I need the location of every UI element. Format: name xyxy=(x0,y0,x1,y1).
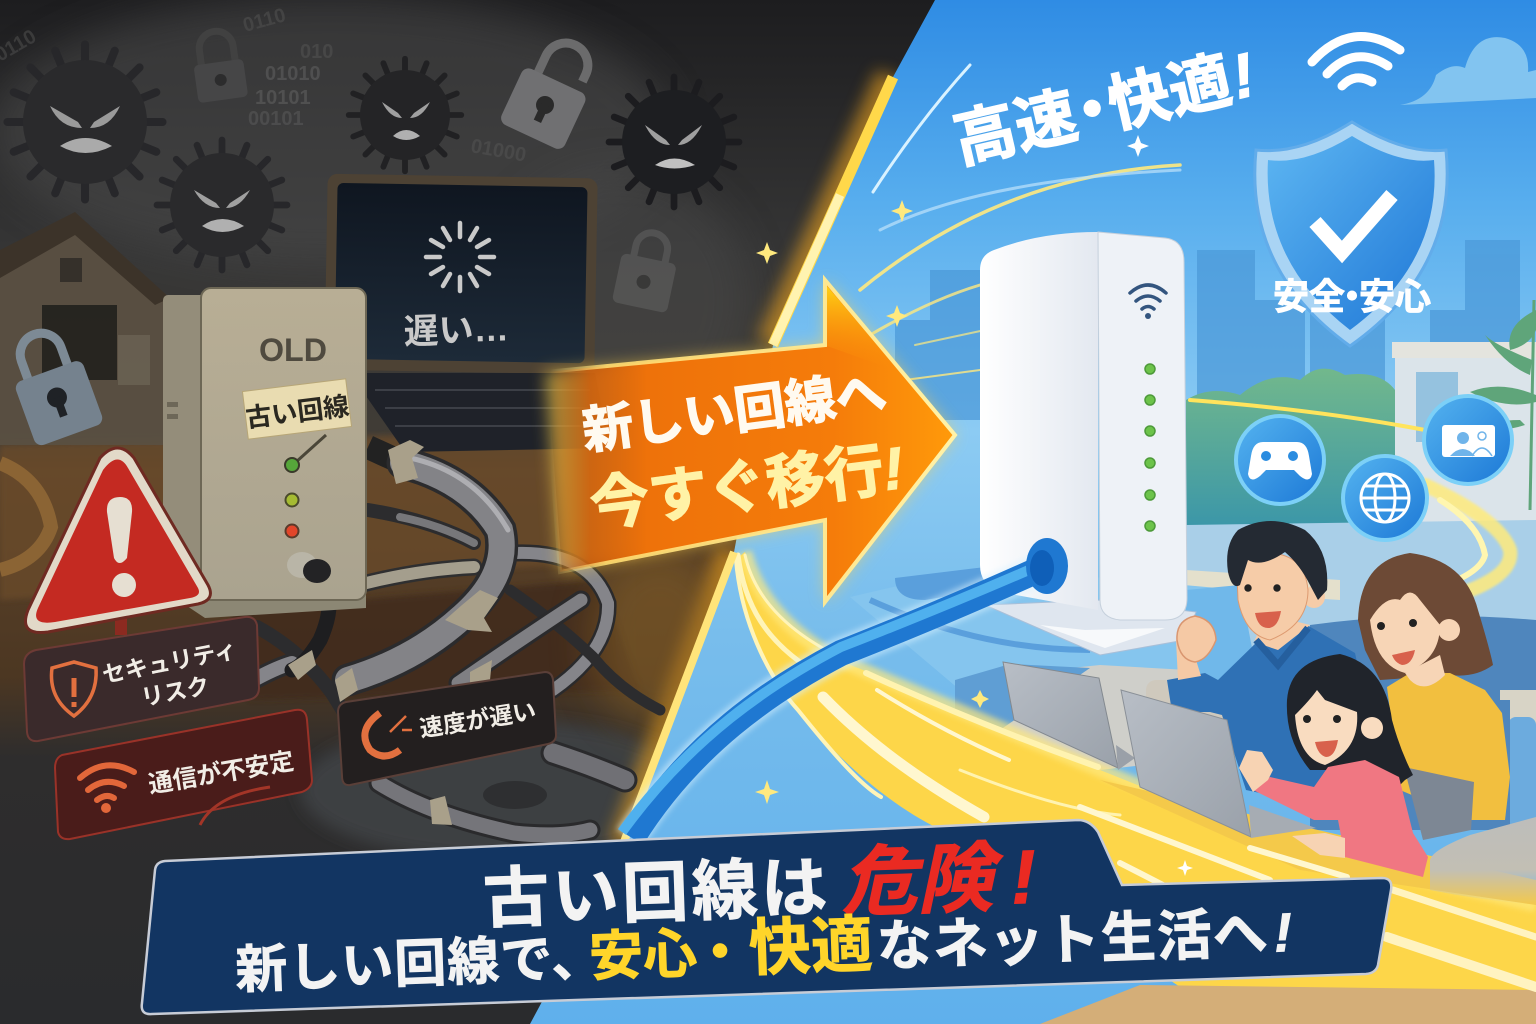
icon: globe bubble xyxy=(1343,456,1427,540)
sofa blue xyxy=(1310,616,1536,700)
old router xyxy=(163,288,366,618)
panel: bright new-line background xyxy=(500,0,1536,1024)
terrace xyxy=(1186,520,1536,647)
text: arrow line 1: 新しい回線へ xyxy=(579,363,890,460)
icon: cloud xyxy=(1400,37,1536,105)
text: slow speed: 速度が遅い xyxy=(418,697,538,742)
arrow xyxy=(545,280,955,602)
status LEDs xyxy=(285,458,299,538)
panel: dark old-line background xyxy=(0,0,898,1024)
heading: fast and comfortable: 高速・快適! xyxy=(948,41,1261,177)
icon: security shield xyxy=(1255,122,1447,346)
person: father xyxy=(1167,521,1370,810)
sparkles xyxy=(755,135,1149,804)
text: security risk: セキュリティ xyxy=(100,636,239,688)
icon: padlock left xyxy=(0,322,104,447)
city buildings xyxy=(895,240,1520,420)
text: slow: 遅い… xyxy=(403,309,509,352)
laptop: slow loading xyxy=(324,174,610,452)
binary digits: 10101 xyxy=(255,87,311,109)
binary digits: 0110 xyxy=(241,4,288,37)
text: unstable: 通信が不安定 xyxy=(146,746,296,799)
icon: virus right xyxy=(609,77,739,207)
icon: virus center left xyxy=(157,140,287,270)
divider glow line xyxy=(622,77,893,847)
white router xyxy=(980,232,1196,655)
banner line 1: 古い回線は xyxy=(482,850,832,936)
laptop: front center xyxy=(1121,690,1316,838)
banner line 2: 快適 xyxy=(748,911,874,984)
binary digits: 00101 xyxy=(248,108,304,130)
icon: wifi warning xyxy=(80,765,134,813)
icon: open padlock xyxy=(498,29,605,152)
status LEDs xyxy=(1145,364,1155,531)
label: old line paper xyxy=(242,379,352,439)
laptop: back left xyxy=(1003,662,1135,770)
person: mother xyxy=(1358,553,1510,820)
label: old line paper: 古い回線 xyxy=(244,391,351,433)
laptop: right xyxy=(1404,767,1474,840)
icon: virus top center xyxy=(349,59,461,171)
padlock on laptop side xyxy=(612,227,682,313)
icon: game bubble xyxy=(1236,416,1324,504)
icon: slow gauge xyxy=(365,713,412,756)
icon: shield alert xyxy=(51,662,96,716)
connector xyxy=(1026,538,1068,594)
text: OLD: OLD xyxy=(259,332,327,368)
blue fiber cable xyxy=(622,538,1068,838)
icon: warning triangle xyxy=(26,448,210,635)
panel: security risk: リスク xyxy=(139,672,212,711)
sky streaks xyxy=(860,65,1180,380)
person: daughter xyxy=(1239,654,1428,877)
banner line 2: 新しい回線で、 xyxy=(234,929,605,1000)
text: arrow line 2: 今すぐ移行! xyxy=(587,435,907,539)
streak lines xyxy=(736,400,1536,987)
port and plug xyxy=(287,552,331,583)
icon: spinner xyxy=(426,223,494,291)
family xyxy=(1003,521,1510,877)
icon: virus top left xyxy=(7,44,162,200)
binary digits: 010 xyxy=(300,41,333,63)
binary digits: 01010 xyxy=(265,63,321,85)
binary digits xyxy=(0,4,528,167)
worn cables xyxy=(250,447,660,835)
icon: video bubble xyxy=(1424,396,1512,484)
binary digits: 01000 xyxy=(469,135,528,167)
banner line 1: ! xyxy=(1009,835,1038,921)
keyboard xyxy=(350,373,610,452)
banner line 1: 危険 xyxy=(839,836,1006,926)
banner line 2: なネット生活へ xyxy=(876,902,1270,978)
speed band xyxy=(735,552,1536,1000)
sofa arm bottom right xyxy=(1430,817,1536,905)
plant xyxy=(1470,300,1536,510)
building at right xyxy=(1392,342,1536,540)
icon: large wifi xyxy=(1312,37,1400,86)
banner xyxy=(142,820,1391,1014)
icon: router wifi xyxy=(1130,285,1166,319)
panel: slow speed xyxy=(338,672,556,785)
text: safe: 安全・安心 xyxy=(1273,276,1431,317)
sparkles near banner xyxy=(1177,860,1193,876)
panel: security risk xyxy=(24,617,259,741)
icon: old house xyxy=(0,212,170,445)
banner line 2: ・ xyxy=(692,922,748,984)
trees xyxy=(1186,369,1395,525)
banner line 2: 安心 xyxy=(588,924,698,988)
panel: unstable connection xyxy=(55,710,312,839)
torn cable wraps xyxy=(288,440,498,825)
icon: padlock top xyxy=(189,28,248,103)
banner line 2: ! xyxy=(1273,901,1293,964)
rope cable at far left xyxy=(0,463,51,570)
